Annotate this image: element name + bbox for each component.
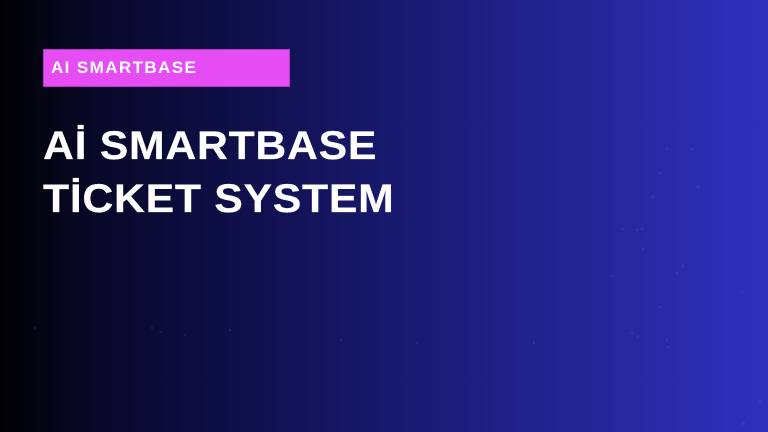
label tag: AI SMARTBASE — [43, 49, 290, 87]
label tag: AI SMARTBASE: AI SMARTBASE — [51, 58, 197, 77]
title: Aİ SMARTBASE — [43, 124, 377, 168]
title: TİCKET SYSTEM — [43, 177, 394, 221]
title — [43, 124, 394, 221]
